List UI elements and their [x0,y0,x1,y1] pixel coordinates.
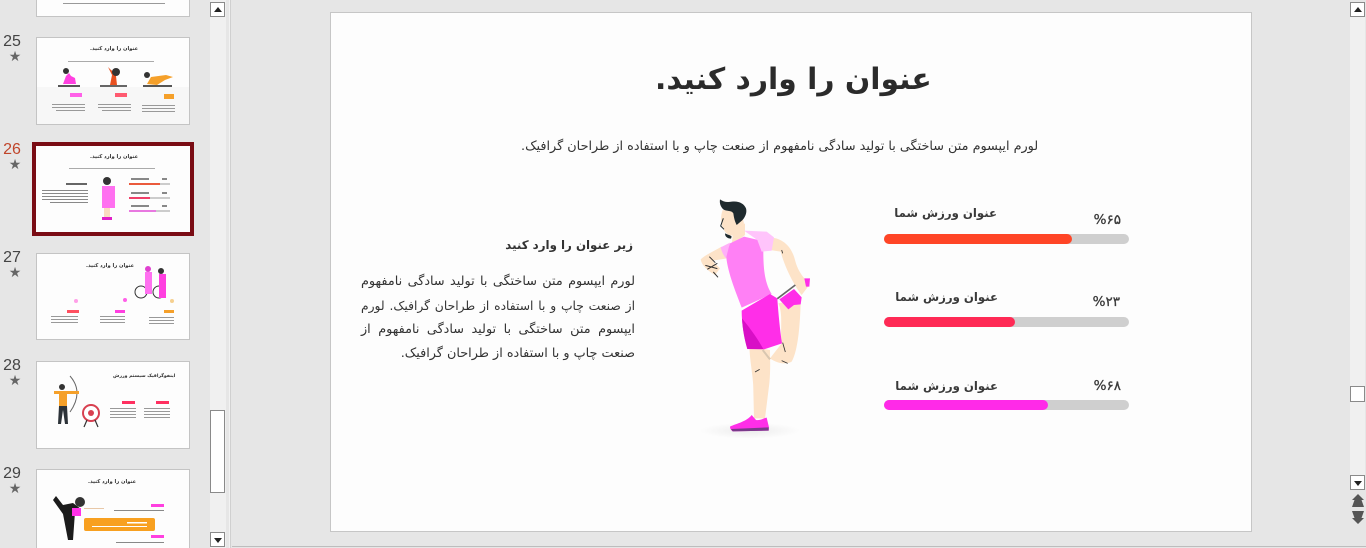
star 26: ★ [9,157,21,173]
bar 1 [884,234,1129,244]
slide number 28: 28 [3,357,21,374]
pane divider [229,0,231,548]
star 25: ★ [9,49,21,65]
thumbnail: slide 25 [36,37,190,125]
illustration: man stretching [700,199,810,434]
thumbnail: slide 25: عنوان را وارد کنید. [90,46,138,52]
right scroll thumb [1350,386,1365,402]
progress row 1 [884,206,1129,244]
subtitle: لورم ایپسوم متن ساختگی با تولید سادگی نامفهوم از صنعت چاپ و با استفاده از طراحان گرافیک. [521,139,1038,154]
percent 1: %۶۵ [1094,212,1121,228]
title: عنوان را وارد کنید. [655,62,932,97]
previous and next slide icons [1352,494,1364,524]
slide number 29: 29 [3,465,21,482]
bar 3 [884,400,1129,410]
thumbnail: slide 29 [36,469,190,548]
scrollbar track [1350,2,1365,489]
star 27: ★ [9,265,21,281]
scroll up button [210,2,225,17]
paragraph: ایپسوم متن ساختگی با تولید سادگی نامفهوم از [361,322,635,337]
paragraph: صنعت چاپ و با استفاده از طراحان گرافیک. [401,346,635,361]
label 2: عنوان ورزش شما [895,290,998,304]
slide number 25: 25 [3,33,21,50]
bottom edge [232,546,1366,547]
scroll thumb [210,410,225,493]
paragraph: از صنعت چاپ و با استفاده از طراحان گرافیک. لورم [361,299,635,313]
paragraph: لورم ایپسوم متن ساختگی با تولید سادگی نامفهوم [361,274,635,289]
right scroll down button [1350,475,1365,490]
thumbnail scrollbar [210,0,226,548]
thumbnail: slide 24 [36,0,190,17]
slide number 26: 26 [3,141,21,158]
label 1: عنوان ورزش شما [894,206,997,220]
star 28: ★ [9,373,21,389]
text block: subheading and paragraph [360,238,635,361]
right scroll up button [1350,2,1365,17]
main slide panel [330,12,1252,532]
thumbnail: slide 28 [36,361,190,449]
thumbnail: slide 28: اینفوگرافیک سیستم ورزش [113,374,175,379]
subheading: زیر عنوان را وارد کنید [505,238,633,252]
thumbnail: slide 27: عنوان را وارد کنید. [86,263,134,269]
percent 3: %۶۸ [1094,378,1121,394]
thumbnail: slide 29: عنوان را وارد کنید. [88,479,136,485]
thumbnail: slide 26 selected: عنوان را وارد کنید. [90,154,138,160]
percent 2: %۲۳ [1093,294,1120,310]
right scrollbar [1350,2,1365,524]
star 29: ★ [9,481,21,497]
bar 2 [884,317,1129,327]
scroll down button [210,532,225,547]
thumbnail: slide 26 selected [32,142,194,236]
slide number 27: 27 [3,249,21,266]
progress row 2 [884,290,1129,327]
thumbnail: slide 27 [36,253,190,340]
paragraph [360,274,635,361]
progress row 3 [884,378,1129,410]
label 3: عنوان ورزش شما [895,379,998,393]
thumbnail pane [0,0,210,548]
